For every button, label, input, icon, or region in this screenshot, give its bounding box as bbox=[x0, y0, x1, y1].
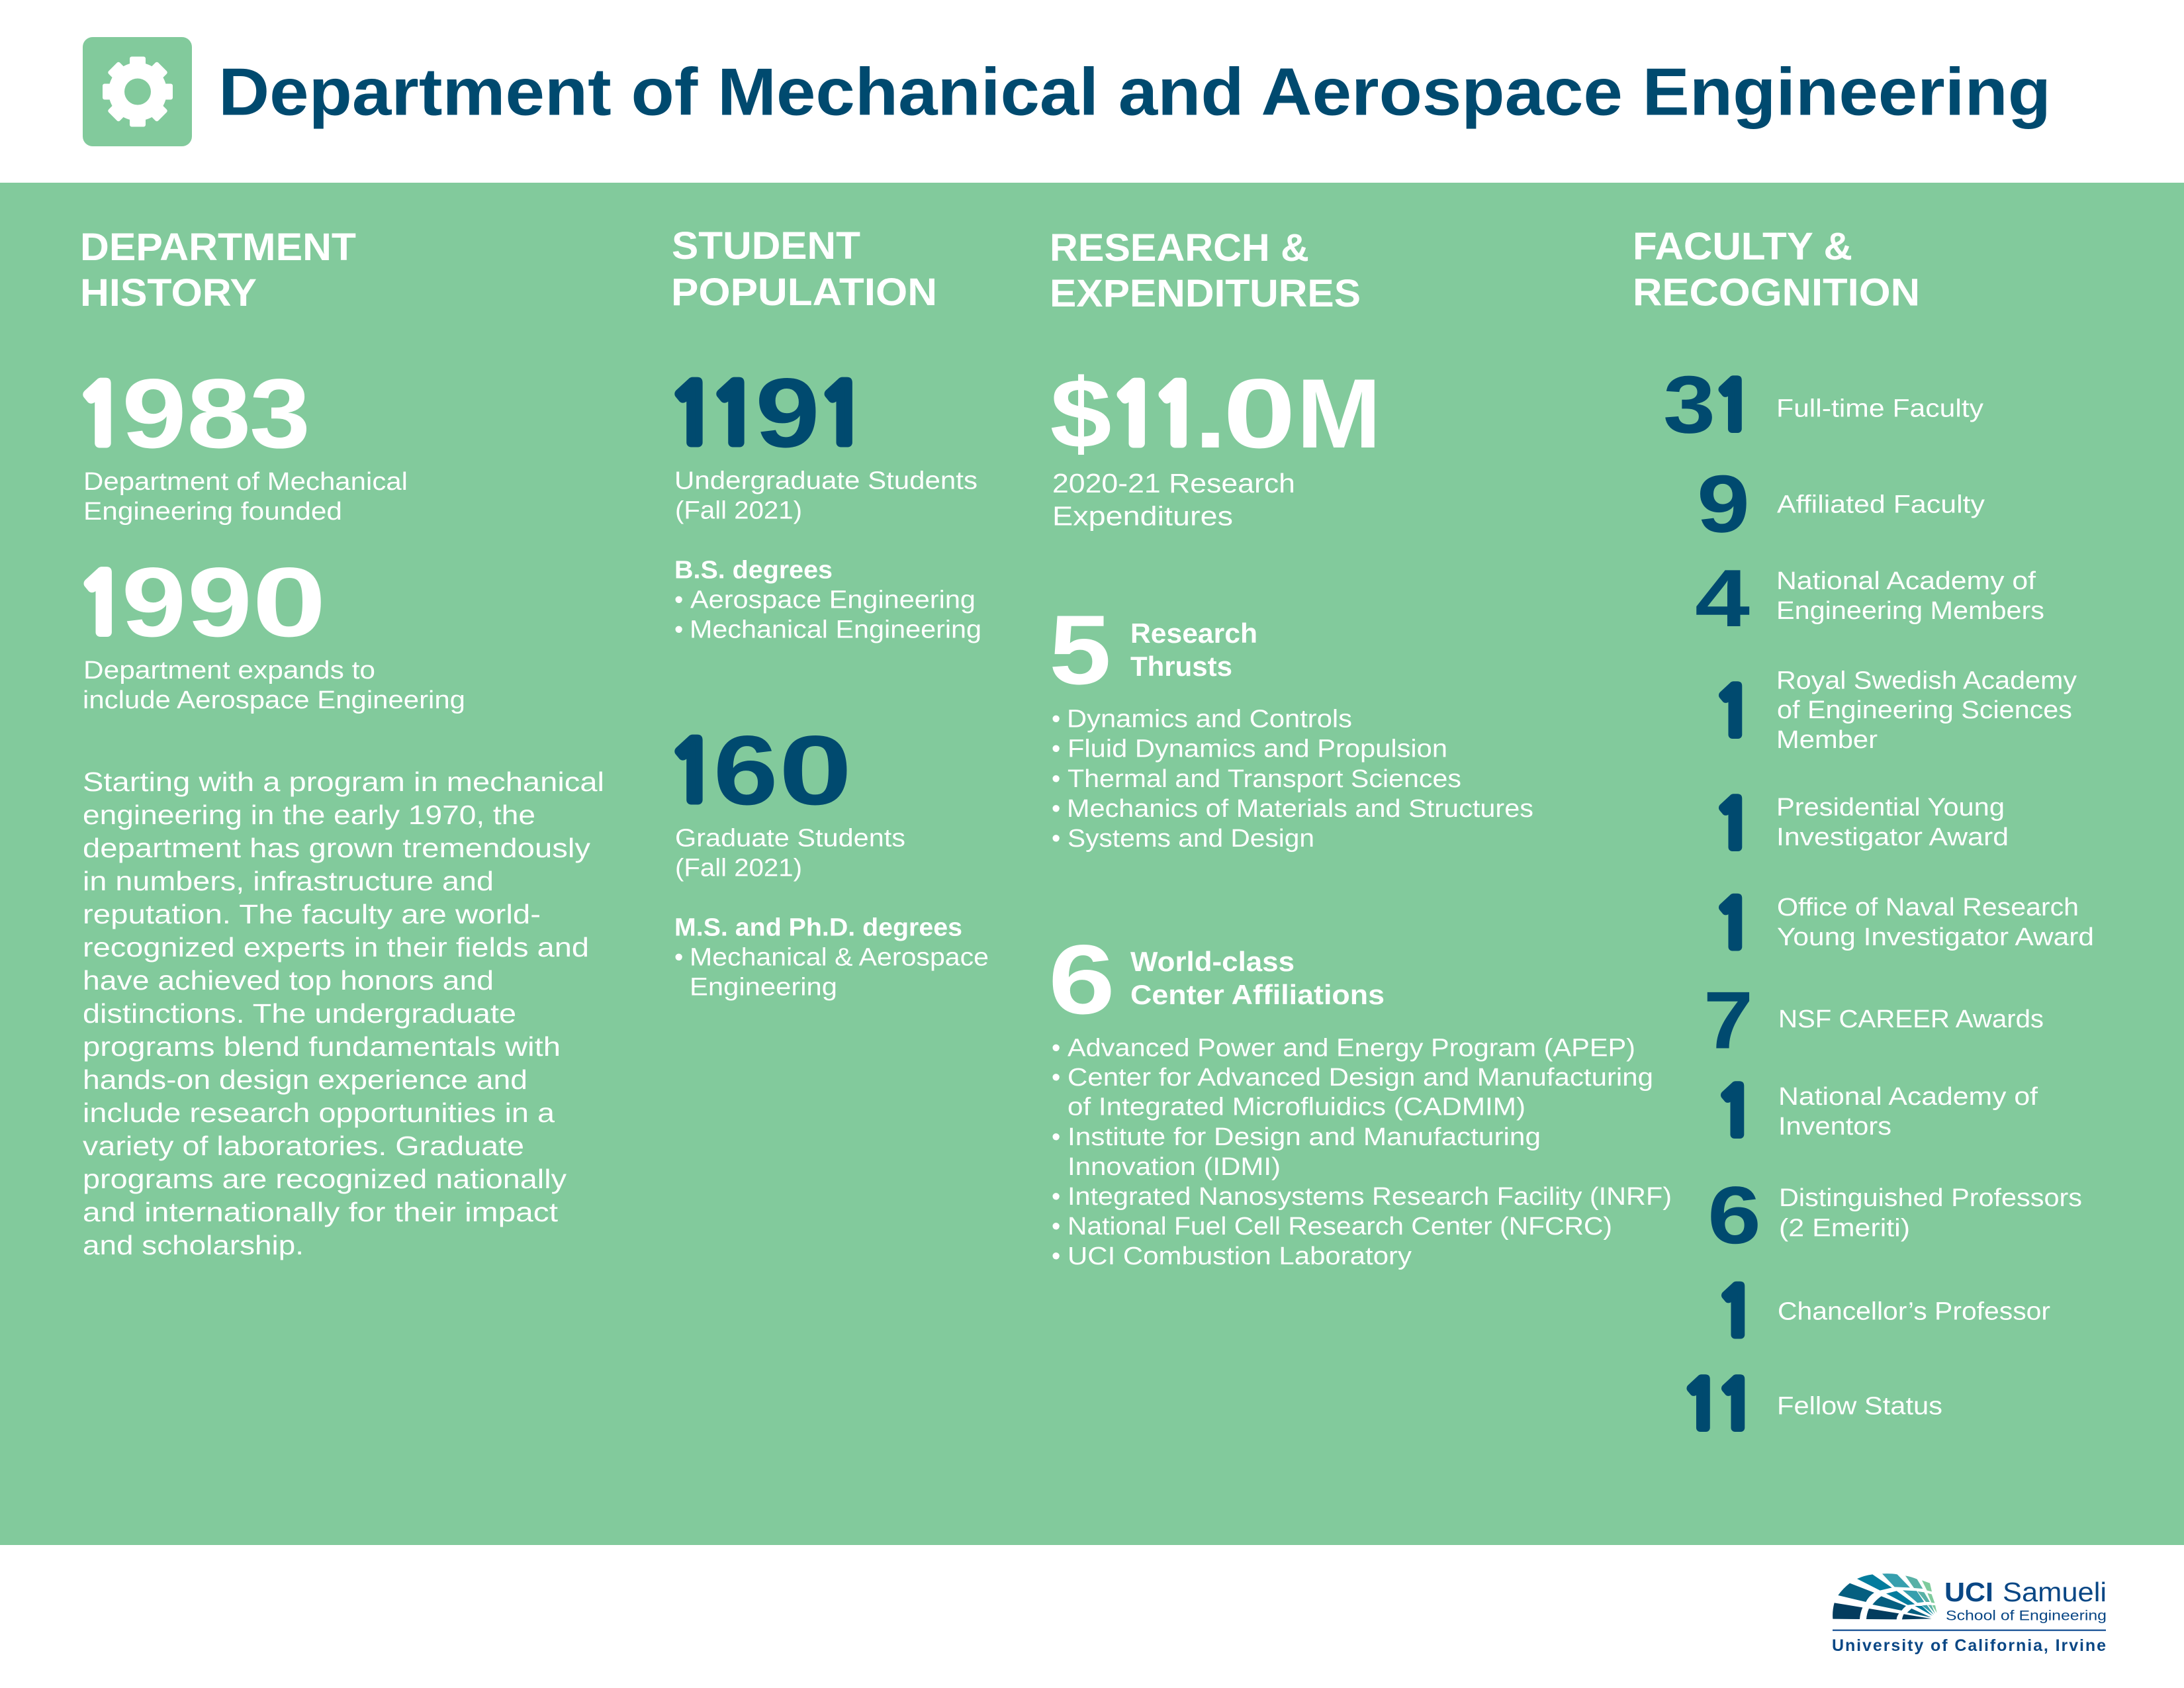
stat: $11.0M: . bbox=[1194, 358, 1227, 469]
logo wordmark bbox=[1832, 1577, 2107, 1655]
stat: 4 national academy of engineering members bbox=[1695, 553, 2044, 644]
text: history paragraph: recognized experts in their fields and bbox=[83, 932, 589, 962]
text: M.S. and Ph.D. degrees: M.S. and Ph.D. degrees bbox=[674, 914, 962, 941]
heading: department history: DEPARTMENT bbox=[80, 226, 356, 269]
text: history paragraph: programs blend fundamentals with bbox=[83, 1031, 561, 1062]
stat: 31 full-time faculty: 1 bbox=[1713, 373, 1754, 440]
text: graduate caption: Graduate Students bbox=[675, 825, 905, 853]
list: center affiliations: Innovation (IDMI) bbox=[1068, 1153, 1281, 1181]
stat: 7 NSF CAREER awards: 7 bbox=[1704, 976, 1753, 1066]
heading: research and expenditures bbox=[1050, 226, 1361, 315]
list: center affiliations: Center for Advanced Design and Manufacturing bbox=[1068, 1064, 1653, 1092]
heading: department history bbox=[80, 226, 356, 314]
list: center affiliations: Institute for Design and Manufacturing bbox=[1068, 1123, 1541, 1151]
stat: 6 world-class center affiliations bbox=[1048, 924, 1385, 1035]
panel: student population bbox=[668, 224, 989, 1001]
stat: 1191 bbox=[668, 357, 868, 468]
stat: 1 national academy of inventors: 1 bbox=[1715, 1079, 1756, 1145]
text: expenditures caption: Expenditures bbox=[1052, 500, 1233, 531]
stat: 1 royal swedish academy member: of Engineering Sciences bbox=[1777, 696, 2072, 724]
text: expenditures caption: 2020-21 Research bbox=[1052, 468, 1295, 498]
stat: 1191: 9 bbox=[755, 357, 820, 468]
stat: 6 world-class center affiliations: World-class bbox=[1130, 946, 1295, 977]
list: center affiliations: National Fuel Cell Research Center (NFCRC) bbox=[1068, 1213, 1612, 1241]
heading: research and expenditures: RESEARCH & bbox=[1050, 226, 1309, 269]
stat: $11.0M bbox=[1050, 358, 1381, 469]
panel: faculty and recognition bbox=[1633, 225, 2094, 1439]
list: center affiliations: • bbox=[1052, 1123, 1060, 1151]
stat: 1 national academy of inventors: Inventors bbox=[1778, 1113, 1891, 1141]
stat: 6 distinguished professors: (2 Emeriti) bbox=[1779, 1214, 1910, 1242]
heading: student population bbox=[671, 224, 937, 314]
list: center affiliations: • bbox=[1052, 1213, 1060, 1241]
text: B.S. degrees: Aerospace Engineering bbox=[690, 586, 976, 614]
text: 1983 caption: Department of Mechanical bbox=[83, 468, 408, 496]
text: B.S. degrees: B.S. degrees bbox=[674, 556, 833, 584]
stat: 6 world-class center affiliations: 6 bbox=[1048, 924, 1115, 1035]
stat: 4 national academy of engineering members: 4 bbox=[1695, 553, 1750, 644]
stat: $11.0M: 1 bbox=[1152, 375, 1202, 457]
stat: 1 office of naval research young investigator award: 1 bbox=[1713, 892, 1754, 958]
logo wordmark: School of Engineering bbox=[1946, 1609, 2107, 1623]
text: M.S. and Ph.D. degrees: Mechanical & Aerospace bbox=[690, 944, 989, 972]
text: history paragraph: hands-on design experience and bbox=[83, 1064, 527, 1095]
heading: faculty and recognition bbox=[1633, 225, 1920, 314]
stat: $11.0M: $ bbox=[1050, 358, 1112, 469]
text: history paragraph: Starting with a program in mechanical bbox=[83, 767, 604, 797]
text: 1990 caption bbox=[83, 657, 465, 714]
logo wordmark: Samueli bbox=[2003, 1577, 2107, 1607]
stat: 160: 1 bbox=[668, 731, 717, 813]
stat: 1 royal swedish academy member: Member bbox=[1776, 726, 1878, 754]
stat: 1990 bbox=[77, 547, 326, 657]
stat: 6 distinguished professors: 6 bbox=[1707, 1170, 1761, 1261]
text: history paragraph: include research opportunities in a bbox=[83, 1098, 555, 1128]
stat: 9 affiliated faculty: Affiliated Faculty bbox=[1777, 491, 1985, 519]
text: history paragraph: in numbers, infrastructure and bbox=[83, 866, 494, 896]
stat: 5 research thrusts: Research bbox=[1130, 618, 1257, 649]
stat: 1 presidential young investigator award: Presidential Young bbox=[1776, 794, 2005, 821]
list: research thrusts bbox=[1052, 706, 1533, 853]
stat: 6 distinguished professors bbox=[1707, 1170, 2082, 1261]
logo wordmark: UCI bbox=[1944, 1577, 1993, 1607]
text: history paragraph: engineering in the early 1970, the bbox=[83, 800, 535, 830]
stat: 1983: 3 bbox=[250, 358, 310, 469]
title: Department of Mechanical and Aerospace Engineering bbox=[218, 56, 2051, 130]
stat: 1 chancellor's professor: Chancellor’s Professor bbox=[1778, 1297, 2050, 1325]
text: 1983 caption bbox=[83, 468, 408, 526]
stat: 1 royal swedish academy member: Royal Swedish Academy bbox=[1776, 667, 2077, 695]
stat: 1 office of naval research young investigator award bbox=[1713, 892, 2094, 958]
list: center affiliations: • bbox=[1052, 1183, 1060, 1211]
list: research thrusts: Dynamics and Controls bbox=[1067, 706, 1352, 733]
stat: 5 research thrusts: 5 bbox=[1049, 594, 1111, 705]
text: 1990 caption: include Aerospace Engineering bbox=[83, 686, 465, 714]
panel: department history bbox=[76, 226, 604, 1260]
list: center affiliations: • bbox=[1052, 1034, 1060, 1062]
stat: 5 research thrusts: Thrusts bbox=[1130, 651, 1232, 682]
stat: 11 fellow status: 1 bbox=[1716, 1373, 1756, 1439]
list: research thrusts: • bbox=[1052, 795, 1060, 823]
text: undergraduate caption: Undergraduate Students bbox=[674, 467, 978, 495]
stat: 160: 6 bbox=[713, 715, 778, 825]
stat: 5 research thrusts bbox=[1049, 594, 1257, 705]
list: center affiliations: Advanced Power and Energy Program (APEP) bbox=[1068, 1034, 1635, 1062]
icon: gear in green rounded square bbox=[83, 37, 192, 146]
panel: research and expenditures bbox=[1048, 226, 1672, 1270]
icon: fan mark bbox=[1833, 1573, 1937, 1619]
text: M.S. and Ph.D. degrees bbox=[674, 914, 989, 1001]
list: center affiliations: • bbox=[1052, 1064, 1060, 1092]
text: history paragraph: programs are recognized nationally bbox=[83, 1164, 567, 1194]
list: research thrusts: • bbox=[1052, 735, 1060, 763]
stat: 9 affiliated faculty bbox=[1697, 459, 1985, 549]
list: center affiliations: • bbox=[1052, 1243, 1060, 1270]
text: M.S. and Ph.D. degrees: Engineering bbox=[690, 973, 837, 1001]
stat: 1 office of naval research young investigator award: Office of Naval Research bbox=[1777, 894, 2079, 921]
logo: UCI Samueli School of Engineering bbox=[1832, 1573, 2107, 1655]
list: center affiliations: of Integrated Microfluidics (CADMIM) bbox=[1068, 1094, 1525, 1121]
text: history paragraph: reputation. The faculty are world- bbox=[83, 899, 541, 929]
stat: $11.0M: 1 bbox=[1110, 375, 1160, 457]
stat: 11 fellow status bbox=[1681, 1373, 1942, 1439]
list: research thrusts: Thermal and Transport Sciences bbox=[1068, 765, 1461, 793]
stat: 4 national academy of engineering members: National Academy of bbox=[1776, 567, 2036, 595]
list: research thrusts: • bbox=[1052, 706, 1060, 733]
heading: department history: HISTORY bbox=[80, 271, 257, 314]
stat: 11 fellow status: 1 bbox=[1681, 1373, 1722, 1439]
stat: 1 presidential young investigator award: 1 bbox=[1713, 792, 1754, 858]
text: graduate caption bbox=[675, 825, 905, 882]
text: expenditures caption bbox=[1052, 468, 1295, 531]
stat: 1191: 1 bbox=[817, 373, 868, 455]
stat: 7 NSF CAREER awards: NSF CAREER Awards bbox=[1778, 1006, 2044, 1033]
stat: 1990: 1 bbox=[77, 563, 127, 645]
stat: 160: 0 bbox=[779, 715, 852, 825]
text: history paragraph: and internationally for their impact bbox=[83, 1197, 559, 1227]
stat: 1191: 1 bbox=[668, 373, 717, 455]
stat: 1 chancellor's professor bbox=[1716, 1280, 2050, 1346]
stat: $11.0M: 0 bbox=[1223, 358, 1296, 469]
stat: 1 office of naval research young investigator award: Young Investigator Award bbox=[1777, 923, 2094, 951]
stat: $11.0M: M bbox=[1297, 358, 1381, 469]
text: history paragraph: variety of laboratories. Graduate bbox=[83, 1131, 524, 1161]
list: center affiliations: UCI Combustion Laboratory bbox=[1068, 1243, 1412, 1270]
stat: 1 royal swedish academy member: 1 bbox=[1713, 679, 1754, 745]
stat: 6 world-class center affiliations: Center Affiliations bbox=[1130, 979, 1385, 1010]
text: history paragraph: distinctions. The undergraduate bbox=[83, 998, 516, 1029]
stat: 1990: 9 bbox=[187, 547, 252, 657]
list: center affiliations: Integrated Nanosystems Research Facility (INRF) bbox=[1068, 1183, 1672, 1211]
text: history paragraph bbox=[83, 767, 604, 1260]
stat: 1191: 1 bbox=[709, 373, 759, 455]
stat: 1983 bbox=[76, 358, 310, 469]
heading: student population: POPULATION bbox=[671, 271, 937, 314]
stat: 1990: 9 bbox=[122, 547, 187, 657]
stat: 9 affiliated faculty: 9 bbox=[1697, 459, 1750, 549]
stat: 1990: 0 bbox=[252, 547, 326, 657]
text: undergraduate caption bbox=[674, 467, 978, 524]
stat: 1983: 8 bbox=[187, 358, 251, 469]
stat: 1 national academy of inventors: National Academy of bbox=[1778, 1083, 2038, 1111]
list: research thrusts: Systems and Design bbox=[1068, 825, 1314, 853]
stat: 7 NSF CAREER awards bbox=[1704, 976, 2044, 1066]
stat: 1 presidential young investigator award bbox=[1713, 792, 2009, 858]
text: history paragraph: have achieved top honors and bbox=[83, 965, 494, 996]
stat: 1 presidential young investigator award: Investigator Award bbox=[1776, 823, 2009, 851]
stat: 1983: 9 bbox=[122, 358, 187, 469]
stat: 4 national academy of engineering members: Engineering Members bbox=[1776, 597, 2044, 625]
heading: faculty and recognition: FACULTY & bbox=[1633, 225, 1852, 268]
stat: 31 full-time faculty: Full-time Faculty bbox=[1776, 395, 1983, 422]
text: graduate caption: (Fall 2021) bbox=[675, 854, 802, 882]
stat: 1 chancellor's professor: 1 bbox=[1716, 1280, 1756, 1346]
stat: 1983: 1 bbox=[76, 375, 126, 457]
text: B.S. degrees bbox=[674, 556, 981, 643]
list: research thrusts: • bbox=[1052, 825, 1060, 853]
stat: 1 royal swedish academy member bbox=[1713, 667, 2077, 754]
text: 1983 caption: Engineering founded bbox=[83, 498, 342, 526]
text: 1990 caption: Department expands to bbox=[83, 657, 375, 684]
text: B.S. degrees: Mechanical Engineering bbox=[690, 616, 981, 643]
stat: 6 distinguished professors: Distinguished Professors bbox=[1779, 1184, 2082, 1212]
text: undergraduate caption: (Fall 2021) bbox=[675, 496, 802, 524]
list: research thrusts: • bbox=[1052, 765, 1060, 793]
list: research thrusts: Mechanics of Materials and Structures bbox=[1067, 795, 1533, 823]
stat: 160 bbox=[668, 715, 852, 825]
logo wordmark: University of California, Irvine bbox=[1832, 1636, 2106, 1655]
stat: 11 fellow status: Fellow Status bbox=[1777, 1393, 1942, 1421]
text: history paragraph: department has grown tremendously bbox=[83, 833, 591, 863]
heading: faculty and recognition: RECOGNITION bbox=[1633, 271, 1920, 314]
stat: 1 national academy of inventors bbox=[1715, 1079, 2038, 1145]
text: history paragraph: and scholarship. bbox=[83, 1230, 304, 1260]
heading: student population: STUDENT bbox=[672, 224, 860, 267]
heading: research and expenditures: EXPENDITURES bbox=[1050, 272, 1361, 315]
text: B.S. degrees: • bbox=[674, 586, 683, 614]
stat: 31 full-time faculty: 3 bbox=[1663, 360, 1715, 450]
text: B.S. degrees: • bbox=[674, 616, 683, 643]
list: research thrusts: Fluid Dynamics and Propulsion bbox=[1068, 735, 1447, 763]
text: M.S. and Ph.D. degrees: • bbox=[674, 944, 683, 972]
list: center affiliations bbox=[1052, 1034, 1672, 1270]
stat: 31 full-time faculty bbox=[1663, 360, 1983, 450]
